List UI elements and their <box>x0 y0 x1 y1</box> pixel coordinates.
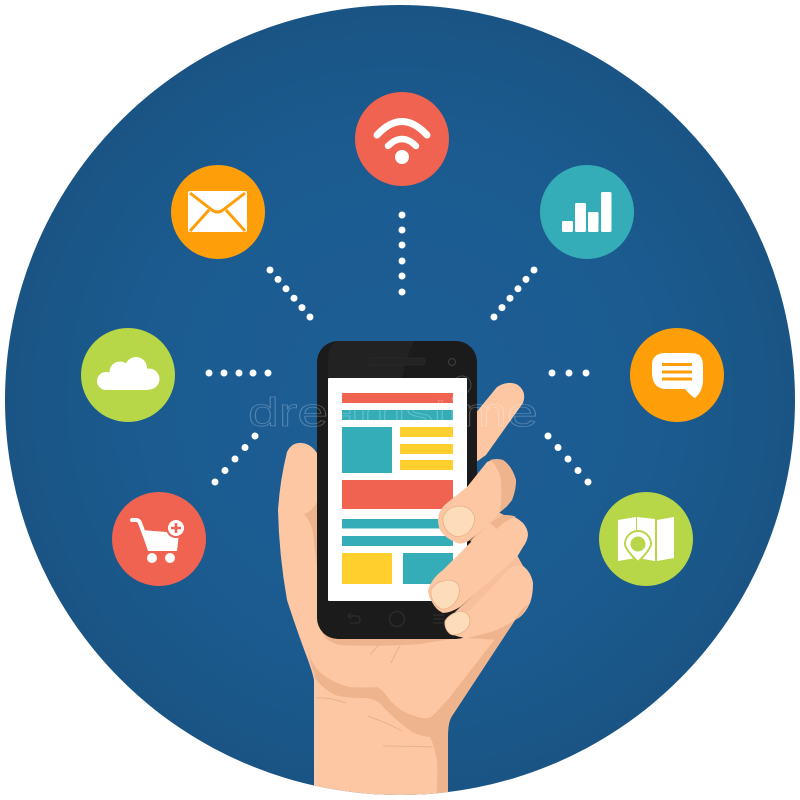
skin between fingers <box>455 512 523 620</box>
ring finger <box>428 515 528 613</box>
dots: chat <box>548 370 590 376</box>
wrist side shade under fingers <box>467 603 530 640</box>
nail: middle finger <box>443 506 474 536</box>
icon: bar chart <box>540 165 634 259</box>
dots: map <box>544 432 592 486</box>
icon: shopping cart <box>112 492 206 586</box>
icon: map with pin <box>599 492 693 586</box>
phone body <box>317 341 477 639</box>
watermark: dreamstime <box>248 391 538 435</box>
thumb base shadow <box>304 500 318 578</box>
watermark <box>248 376 538 435</box>
nail: ring finger <box>431 580 459 609</box>
screen <box>328 378 467 601</box>
fingers over phone <box>428 459 533 640</box>
index finger behind phone <box>465 383 524 470</box>
back button <box>348 613 360 623</box>
ring finger shade <box>490 515 516 529</box>
little finger <box>445 565 533 638</box>
hand silhouette <box>278 443 523 800</box>
wrist shadow band <box>308 620 516 794</box>
phone <box>317 341 477 639</box>
middle finger <box>438 459 516 544</box>
icon: cloud <box>81 328 175 422</box>
middle finger knuckle shade <box>490 459 516 512</box>
icon: speech bubble <box>630 328 724 422</box>
speaker <box>368 358 425 365</box>
dots: chart <box>490 266 538 320</box>
dots: cart <box>212 432 258 486</box>
menu button <box>433 615 444 623</box>
shadow under phone <box>318 615 470 646</box>
nail: little finger <box>445 611 470 635</box>
icon: mail <box>171 165 265 259</box>
home button <box>390 612 404 626</box>
dots: cloud <box>206 370 272 376</box>
dots: mail <box>266 266 314 320</box>
skin creases <box>316 646 432 747</box>
dots: wifi <box>398 212 406 296</box>
camera <box>448 358 456 366</box>
icon: wifi <box>355 92 449 186</box>
dotted connectors <box>206 212 592 486</box>
hand holding phone <box>278 341 533 800</box>
